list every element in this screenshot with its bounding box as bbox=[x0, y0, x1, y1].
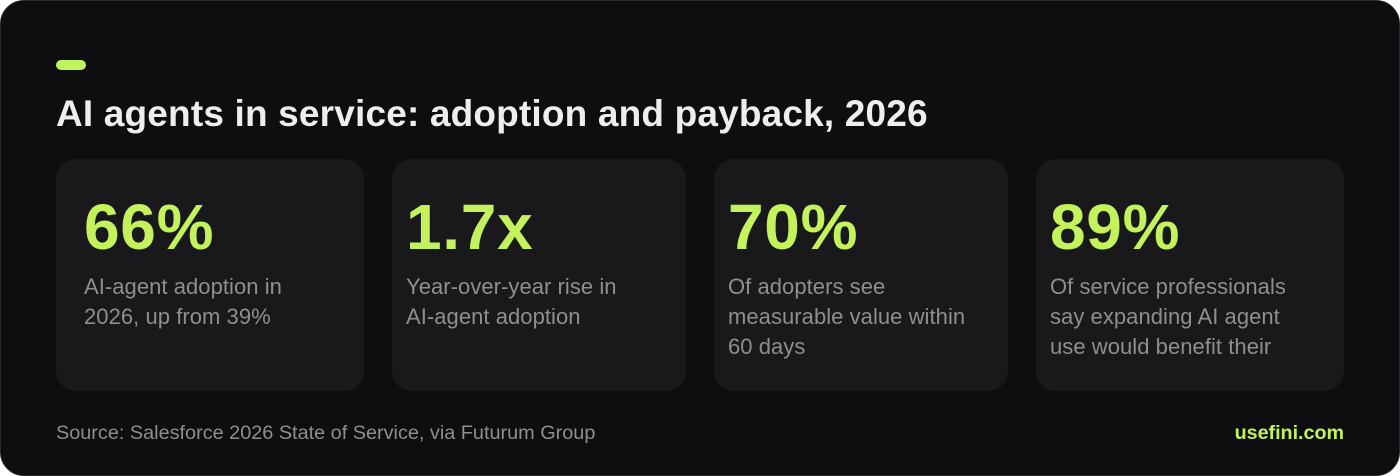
stat description: 2026, up from 39% bbox=[84, 304, 271, 329]
stat value: 1.7x bbox=[406, 191, 533, 263]
stat description bbox=[84, 274, 282, 329]
accent bar bbox=[56, 60, 86, 70]
stat description: AI-agent adoption in bbox=[84, 274, 282, 299]
stat value: 66% bbox=[84, 191, 214, 263]
stat description: 60 days bbox=[728, 334, 805, 359]
panel: stat 89% bbox=[1036, 159, 1344, 391]
panel: stat 66% bbox=[56, 159, 364, 391]
stat description bbox=[1050, 274, 1286, 359]
brand link: usefini.com bbox=[1235, 422, 1344, 444]
stat value: 70% bbox=[728, 191, 858, 263]
panel: stat 70% bbox=[714, 159, 1008, 391]
stat description: Of adopters see bbox=[728, 274, 885, 299]
stat description bbox=[728, 274, 965, 359]
stat description: Of service professionals bbox=[1050, 274, 1286, 299]
source note: Source: Salesforce 2026 State of Service, via Futurum Group bbox=[56, 422, 595, 444]
stat description bbox=[406, 274, 617, 329]
stat description: measurable value within bbox=[728, 304, 965, 329]
title: AI agents in service: adoption and payback, 2026 bbox=[56, 93, 928, 134]
stat value: 89% bbox=[1050, 191, 1180, 263]
stat description: AI-agent adoption bbox=[406, 304, 581, 329]
panel: stat 1.7x bbox=[392, 159, 686, 391]
stat description: Year-over-year rise in bbox=[406, 274, 617, 299]
stat description: use would benefit their bbox=[1050, 334, 1271, 359]
stat description: say expanding AI agent bbox=[1050, 304, 1280, 329]
